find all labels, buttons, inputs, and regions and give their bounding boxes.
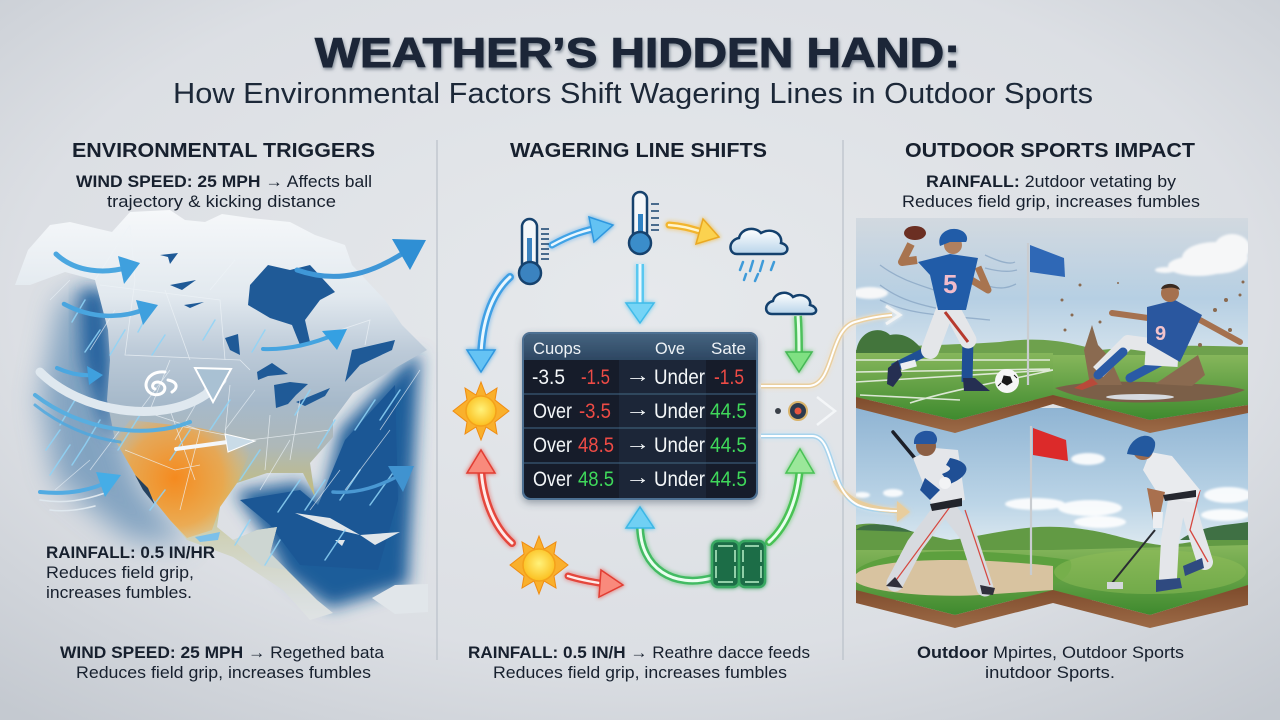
panel: wagering line shifts bbox=[453, 140, 835, 682]
table row 3 bbox=[533, 432, 747, 457]
table header: Ove bbox=[655, 339, 685, 358]
table row 2: Over bbox=[533, 400, 572, 423]
table row 4: 44.5 bbox=[710, 468, 747, 491]
table row 2: → bbox=[625, 398, 650, 421]
text block: rainfall footer bbox=[468, 643, 810, 682]
land mass bbox=[15, 210, 427, 620]
text block: rainfall bbox=[902, 172, 1200, 211]
arrow: sun up red bbox=[467, 450, 512, 543]
icon: storm swirl bbox=[146, 372, 176, 395]
table row 1: → bbox=[625, 364, 650, 387]
table row 1: Under bbox=[654, 366, 705, 389]
table header bbox=[524, 334, 756, 360]
flag: red bbox=[1031, 426, 1068, 575]
table row 1 bbox=[532, 364, 744, 389]
table row 4: Over bbox=[533, 468, 572, 491]
icon: sun bottom bbox=[510, 536, 568, 594]
callout: rainfall: Reduces field grip, bbox=[46, 563, 194, 582]
figure: quarterback: 5 bbox=[943, 269, 957, 299]
arrow: thermometer down to table bbox=[626, 264, 654, 323]
icon: rain cloud bbox=[730, 229, 787, 281]
table row 3: 44.5 bbox=[710, 434, 747, 457]
wind arrow: atlantic south bbox=[333, 466, 414, 492]
panel: outdoor sports impact bbox=[761, 140, 1252, 682]
large wind arrow: west coast bbox=[35, 368, 231, 442]
ground tile right bbox=[1053, 355, 1248, 420]
text block: wind speed footer: Reduces field grip, increases fumbles bbox=[76, 663, 371, 682]
text block: rainfall footer: Reduces field grip, increases fumbles bbox=[493, 663, 787, 682]
heading: outdoor sports impact: OUTDOOR SPORTS IMPACT bbox=[905, 140, 1195, 162]
ocean halo bbox=[40, 285, 190, 545]
wind arrow: pacific small bbox=[57, 366, 103, 385]
table row 2: -3.5 bbox=[579, 400, 611, 423]
figure: golfer bbox=[1107, 436, 1208, 592]
table row 3: 48.5 bbox=[578, 434, 614, 457]
text block: wind speed footer bbox=[60, 643, 385, 682]
icon: thermometer top bbox=[629, 192, 659, 254]
text block: rainfall: RAINFALL: 2utdoor vetating by bbox=[926, 172, 1177, 191]
wind arrow: northwest bbox=[56, 254, 140, 284]
text block: outdoor sports footer: inutdoor Sports. bbox=[985, 663, 1115, 682]
icon: thermometer left bbox=[519, 219, 549, 284]
heading: wagering line shifts: WAGERING LINE SHIFTS bbox=[510, 140, 767, 162]
wind arrow: pacific south bbox=[40, 472, 121, 511]
title: WEATHER’S HIDDEN HAND: bbox=[315, 29, 960, 76]
sand bunker bbox=[856, 551, 1071, 578]
text block: outdoor sports footer bbox=[917, 643, 1184, 682]
subtitle: How Environmental Factors Shift Wagering Lines in Outdoor Sports bbox=[173, 78, 1093, 110]
table row 3: → bbox=[625, 432, 650, 455]
wind lines bbox=[880, 255, 1017, 320]
hills bbox=[856, 524, 1248, 600]
ground tile bbox=[856, 545, 1248, 615]
figure: sliding player bbox=[1074, 284, 1240, 390]
figure: batter bbox=[886, 431, 995, 595]
table row 3: Over bbox=[533, 434, 572, 457]
callout: rainfall: RAINFALL: 0.5 IN/HR bbox=[46, 543, 215, 562]
text block: rainfall footer: RAINFALL: 0.5 IN/H → Reathre dacce feeds bbox=[468, 643, 810, 662]
table row 1: -1.5 bbox=[581, 366, 610, 389]
table row 3: Under bbox=[654, 434, 705, 457]
sports scene top row bbox=[852, 218, 1250, 433]
arrow: sun right red bbox=[568, 570, 623, 597]
text block: wind speed: WIND SPEED: 25 MPH → Affects ball bbox=[76, 172, 372, 191]
connector: to football panel bbox=[761, 306, 900, 386]
panel: environmental triggers bbox=[15, 140, 428, 682]
arrow: thermometer to rain cloud bbox=[669, 219, 719, 244]
icon: green scoreboard bbox=[712, 541, 765, 587]
rain streaks bbox=[46, 300, 400, 565]
table row 4: 48.5 bbox=[578, 468, 614, 491]
icon: small dial and chevron bbox=[775, 397, 835, 425]
table row 2 bbox=[533, 398, 747, 423]
callout: rainfall bbox=[46, 543, 215, 602]
ground tile left bbox=[856, 353, 1053, 420]
callout: rainfall: increases fumbles. bbox=[46, 583, 192, 602]
clouds bottom bbox=[854, 453, 1252, 528]
arrow: thermometer to thermometer bbox=[552, 217, 613, 245]
connector: to baseball panel bbox=[761, 436, 910, 522]
icon: cloud bbox=[766, 293, 816, 314]
mud puddle bbox=[1055, 382, 1245, 402]
text block: rainfall: Reduces field grip, increases fumbles bbox=[902, 192, 1200, 211]
table header: Sate bbox=[711, 339, 746, 358]
central america bbox=[233, 527, 287, 570]
flag: blue bbox=[1028, 243, 1065, 385]
table row 1: -1.5 bbox=[714, 366, 744, 389]
wind arrow: pacific northwest bbox=[64, 300, 158, 325]
text block: wind speed footer: WIND SPEED: 25 MPH → Regethed bata bbox=[60, 643, 385, 662]
figure: sliding player: 9 bbox=[1155, 323, 1166, 345]
text block: outdoor sports footer: Outdoor Mpirtes, Outdoor Sports bbox=[917, 643, 1184, 662]
table: wagering lines bbox=[522, 332, 758, 500]
table row 2: 44.5 bbox=[710, 400, 747, 423]
text block: wind speed bbox=[76, 172, 372, 211]
arrow: thermometer down to sun bbox=[467, 277, 510, 372]
map: North America weather bbox=[15, 210, 428, 620]
heading: environmental triggers: ENVIRONMENTAL TRIGGERS bbox=[72, 140, 375, 162]
hudson bay and lakes bbox=[135, 253, 395, 505]
south america and caribbean bbox=[295, 513, 428, 614]
wind arrow: atlantic north bbox=[297, 239, 426, 276]
table row 2: Under bbox=[654, 400, 705, 423]
state and province borders bbox=[95, 225, 370, 510]
hills and trees bbox=[856, 340, 1248, 400]
figure: quarterback bbox=[880, 226, 1019, 393]
table row 4: Under bbox=[654, 468, 705, 491]
mud splash bbox=[1060, 280, 1244, 386]
sports scene bottom row bbox=[854, 408, 1252, 628]
wind arrow: central white bbox=[176, 434, 255, 452]
table row 4: → bbox=[625, 466, 650, 489]
title bbox=[173, 29, 1093, 110]
icon: sun left bbox=[453, 382, 509, 440]
clouds top bbox=[852, 234, 1250, 299]
arrow: cloud down to table bbox=[786, 316, 812, 372]
table row 1: -3.5 bbox=[532, 366, 565, 389]
table row 4 bbox=[533, 466, 747, 491]
wind arrow: quebec bbox=[263, 329, 347, 350]
text block: wind speed: trajectory & kicking distance bbox=[107, 192, 336, 211]
arrow: scoreboard to table green curve bbox=[626, 507, 712, 581]
table header: Cuops bbox=[533, 339, 581, 358]
arrow: scoreboard up green bbox=[769, 449, 814, 542]
